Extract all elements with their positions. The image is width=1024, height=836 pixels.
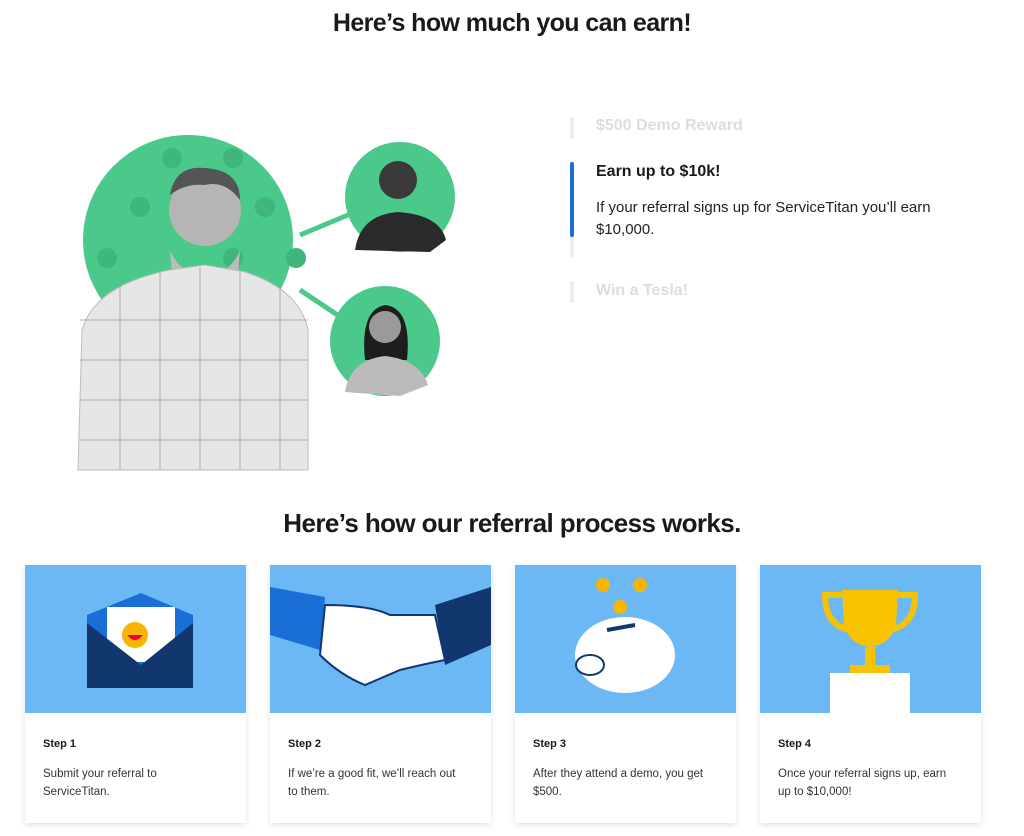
card: step 3: After they attend a demo, you get $500. [533, 768, 703, 798]
section heading: Here’s how our referral process works. [283, 508, 741, 538]
man [170, 250, 240, 275]
card: step 3: Step 3 [533, 738, 566, 750]
card: step 2 [270, 565, 491, 823]
card: step 1: Step 1 [43, 738, 76, 750]
title: Here’s how much you can earn! [333, 9, 691, 37]
card: step 3 [515, 565, 736, 823]
illustration: people [78, 135, 455, 470]
card: step 2: Step 2 [288, 738, 321, 750]
reward list: Win a Tesla! [596, 282, 688, 299]
person small 1 [379, 161, 417, 199]
card: step 4 [760, 565, 981, 823]
reward list: Earn up to $10k! [596, 163, 720, 180]
card: step 4: Once your referral signs up, earn up to $10,000! [778, 768, 946, 798]
reward list: $500 Demo Reward [596, 117, 743, 134]
person small 2 [364, 305, 408, 360]
reward list [570, 117, 931, 303]
card: step 1 [25, 565, 246, 823]
card: step 1: Submit your referral to ServiceTitan. [43, 768, 157, 798]
card: step 4: Step 4 [778, 738, 811, 750]
card: step 2: If we’re a good fit, we’ll reach out to them. [288, 768, 455, 798]
reward list: If your referral signs up for ServiceTitan you’ll earn $10,000. [596, 199, 931, 238]
